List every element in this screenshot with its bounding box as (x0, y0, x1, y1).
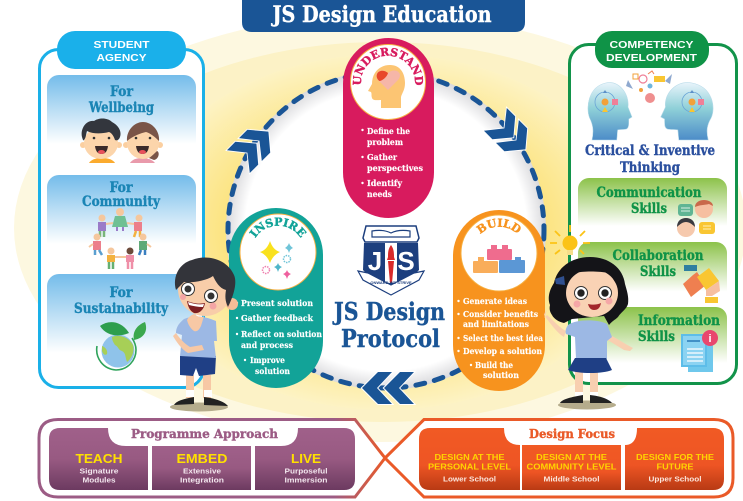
school crest: J (368, 246, 382, 276)
header pill: student agency: STUDENT (94, 39, 150, 51)
card: collaboration skills: Skills (640, 264, 676, 280)
school crest: S (397, 246, 415, 276)
bullets: build (457, 297, 543, 381)
icon: children in a circle (89, 208, 151, 269)
arrow: bottom chevrons (362, 372, 414, 404)
bullets: understand (361, 127, 423, 200)
icon: document with info badge: i (708, 333, 712, 345)
bullets: inspire: Gather feedback (241, 314, 314, 324)
card: information skills (578, 307, 727, 377)
header pill: student agency: AGENCY (96, 52, 146, 64)
arrow: top-left chevrons (227, 120, 280, 173)
bullets: build: Select the best idea (463, 334, 543, 344)
bullets: understand: Gather (367, 153, 397, 163)
panel: programme approach (49, 427, 355, 490)
bullets: inspire: solution (255, 367, 290, 377)
title banner: JS Design Education (271, 2, 492, 28)
label: inspire: INSPIRE (248, 217, 307, 238)
item: community level: Middle School (544, 474, 600, 484)
card: communication skills (578, 178, 727, 238)
header pill: competency development: DEVELOPMENT (606, 52, 698, 64)
item: embed: Extensive (183, 466, 221, 476)
card: for community: For (110, 180, 133, 196)
item: community level (526, 452, 616, 484)
label: understand: UNDERSTAND (352, 48, 424, 86)
icon: document with info badge (681, 330, 718, 372)
arrow: top-right chevrons (484, 108, 537, 161)
bullets: understand: perspectives (367, 164, 423, 174)
item: community level: COMMUNITY LEVEL (526, 462, 616, 472)
bullets: inspire: Present solution (241, 299, 313, 309)
card: collaboration skills: Collaboration (612, 248, 704, 264)
heading: critical and inventive thinking (585, 143, 715, 176)
panel: competency development (570, 31, 736, 384)
card: for wellbeing: Wellbeing (88, 100, 154, 116)
header pill: competency development: COMPETENCY (610, 39, 694, 51)
card: for sustainability: Sustainability (74, 301, 169, 317)
item: live: LIVE (291, 451, 321, 466)
dashed cycle ring (228, 72, 544, 388)
icon: hands joining puzzle (683, 265, 720, 303)
heading: JS Design Protocol: JS Design (332, 297, 445, 326)
bullets: build: Build the (475, 361, 513, 371)
icon: sparkles (260, 241, 293, 279)
item: live: Immersion (284, 476, 328, 484)
card: for sustainability: For (110, 285, 133, 301)
outline: programme approach frame (39, 420, 385, 497)
bullets: inspire (236, 299, 322, 377)
item: teach (76, 451, 122, 484)
card: for community (47, 175, 196, 269)
heading: critical and inventive thinking: Critical & Inventive (585, 143, 715, 159)
item: live: Purposeful (284, 466, 328, 476)
item: teach: Signature (80, 466, 118, 476)
card: for wellbeing: For (110, 84, 134, 100)
step: understand (343, 38, 434, 218)
step: build (453, 210, 545, 391)
bullets: understand: Identify (367, 179, 403, 189)
icon: head with heart (368, 65, 405, 108)
item: embed: EMBED (176, 451, 228, 466)
inner white circle (226, 70, 546, 390)
header pill: student agency (57, 31, 186, 69)
icon: two heads with ideas (588, 71, 713, 140)
item: design for the future: DESIGN FOR THE (636, 452, 714, 462)
bullets: inspire: Improve (250, 356, 286, 366)
bullets: build: Consider benefits (463, 310, 538, 320)
heading: critical and inventive thinking: Thinking (620, 160, 680, 176)
outline: design focus frame (385, 420, 733, 497)
card: for wellbeing (47, 75, 196, 167)
card: communication skills: Skills (631, 201, 667, 217)
card: for community: Community (82, 194, 161, 210)
bullets: inspire: Reflect on solution (241, 330, 322, 340)
item: design for the future: Upper School (648, 474, 702, 484)
icon: people talking (677, 200, 715, 237)
bullets: understand: Define the (367, 127, 411, 137)
bullets: understand: needs (367, 190, 392, 200)
bullets: build: Develop a solution (463, 347, 542, 357)
bullets: understand: problem (367, 138, 403, 148)
heading: JS Design Protocol: Protocol (341, 324, 440, 353)
bullets: build: Generate ideas (463, 297, 527, 307)
item: personal level: DESIGN AT THE (434, 452, 505, 462)
item: teach: Modules (82, 476, 116, 484)
step: inspire (229, 208, 323, 388)
card: collaboration skills (578, 242, 727, 304)
panel: student agency (40, 31, 204, 388)
panel: design focus (419, 426, 724, 490)
icon: light bulb (550, 225, 590, 255)
item: embed (176, 451, 228, 484)
item: live (284, 451, 328, 484)
icon: earth with leaves (97, 322, 146, 370)
illustration: girl (544, 225, 633, 410)
label: build: BUILD (476, 218, 521, 234)
illustration: boy (170, 258, 238, 412)
item: personal level (428, 452, 511, 484)
card: information skills: Information (638, 313, 720, 329)
item: design for the future (636, 452, 714, 484)
bullets: build: solution (483, 371, 519, 381)
card: for sustainability (47, 274, 196, 379)
card: information skills: Skills (638, 329, 675, 345)
bullets: build: and limitations (463, 320, 529, 330)
header pill: competency development (595, 31, 709, 68)
heading: JS Design Protocol (332, 297, 445, 353)
school crest: ONWARD WE STRIVE (370, 280, 412, 285)
item: personal level: Lower School (443, 474, 496, 484)
panel: programme approach: Programme Approach (131, 427, 278, 441)
school crest (358, 226, 424, 295)
item: community level: DESIGN AT THE (536, 452, 607, 462)
bullets: inspire: and process (241, 341, 293, 351)
icon: two children faces (80, 118, 163, 163)
item: teach: TEACH (76, 451, 122, 466)
item: personal level: PERSONAL LEVEL (428, 462, 511, 472)
item: embed: Integration (180, 476, 224, 484)
card: communication skills: Communication (596, 185, 702, 201)
panel: design focus: Design Focus (529, 426, 615, 441)
icon: building bricks (473, 245, 525, 273)
item: design for the future: FUTURE (656, 462, 694, 472)
